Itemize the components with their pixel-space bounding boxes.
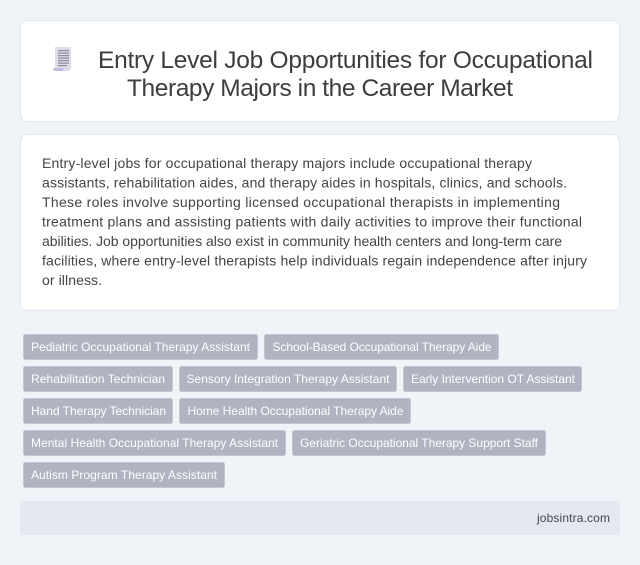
tag: Geriatric Occupational Therapy Support Staff — [300, 436, 539, 450]
text block: description: facilities, where entry-level therapists help individuals regain independence after injury — [42, 252, 587, 268]
text block: description — [42, 155, 587, 288]
tag: Hand Therapy Technician — [31, 404, 166, 418]
tag: School-Based Occupational Therapy Aide — [272, 340, 492, 354]
text block: description: assistants, rehabilitation aides, and therapy aides in hospitals, clinics, and schools. — [42, 174, 567, 190]
panel: header card — [20, 20, 620, 122]
text block: description: treatment plans and assisting patients with daily activities to improve their functional — [42, 214, 582, 230]
tag — [404, 366, 582, 392]
tag: Home Health Occupational Therapy Aide — [188, 404, 404, 418]
tag — [24, 398, 172, 424]
title: Entry Level Job Opportunities for Occupational — [98, 47, 593, 74]
text block: description: abilities. Job opportunities also exist in community health centers and long-term care — [42, 233, 562, 249]
tag: Sensory Integration Therapy Assistant — [186, 372, 390, 386]
text block: description: or illness. — [42, 272, 102, 288]
tag: Pediatric Occupational Therapy Assistant — [31, 340, 251, 354]
tag: Early Intervention OT Assistant — [411, 372, 576, 386]
tag — [180, 398, 410, 424]
footer — [20, 501, 620, 535]
title — [98, 47, 593, 102]
tag: Autism Program Therapy Assistant — [31, 468, 218, 482]
tag — [292, 430, 546, 456]
tag: Mental Health Occupational Therapy Assistant — [31, 436, 279, 450]
tag — [180, 366, 396, 392]
text block: description: These roles involve supporting licensed occupational therapists in implementing — [42, 194, 560, 210]
tag: Rehabilitation Technician — [31, 372, 165, 386]
panel: description — [20, 134, 620, 310]
tag — [264, 334, 498, 360]
tag — [24, 430, 286, 456]
tag list — [24, 334, 582, 488]
text block: description: Entry-level jobs for occupational therapy majors include occupational therapy — [42, 155, 532, 171]
icon: document scroll — [53, 47, 71, 71]
footer: jobsintra.com — [536, 511, 610, 525]
title: Therapy Majors in the Career Market — [127, 75, 513, 102]
tag — [24, 366, 172, 392]
tag — [24, 334, 258, 360]
tag — [24, 462, 224, 488]
